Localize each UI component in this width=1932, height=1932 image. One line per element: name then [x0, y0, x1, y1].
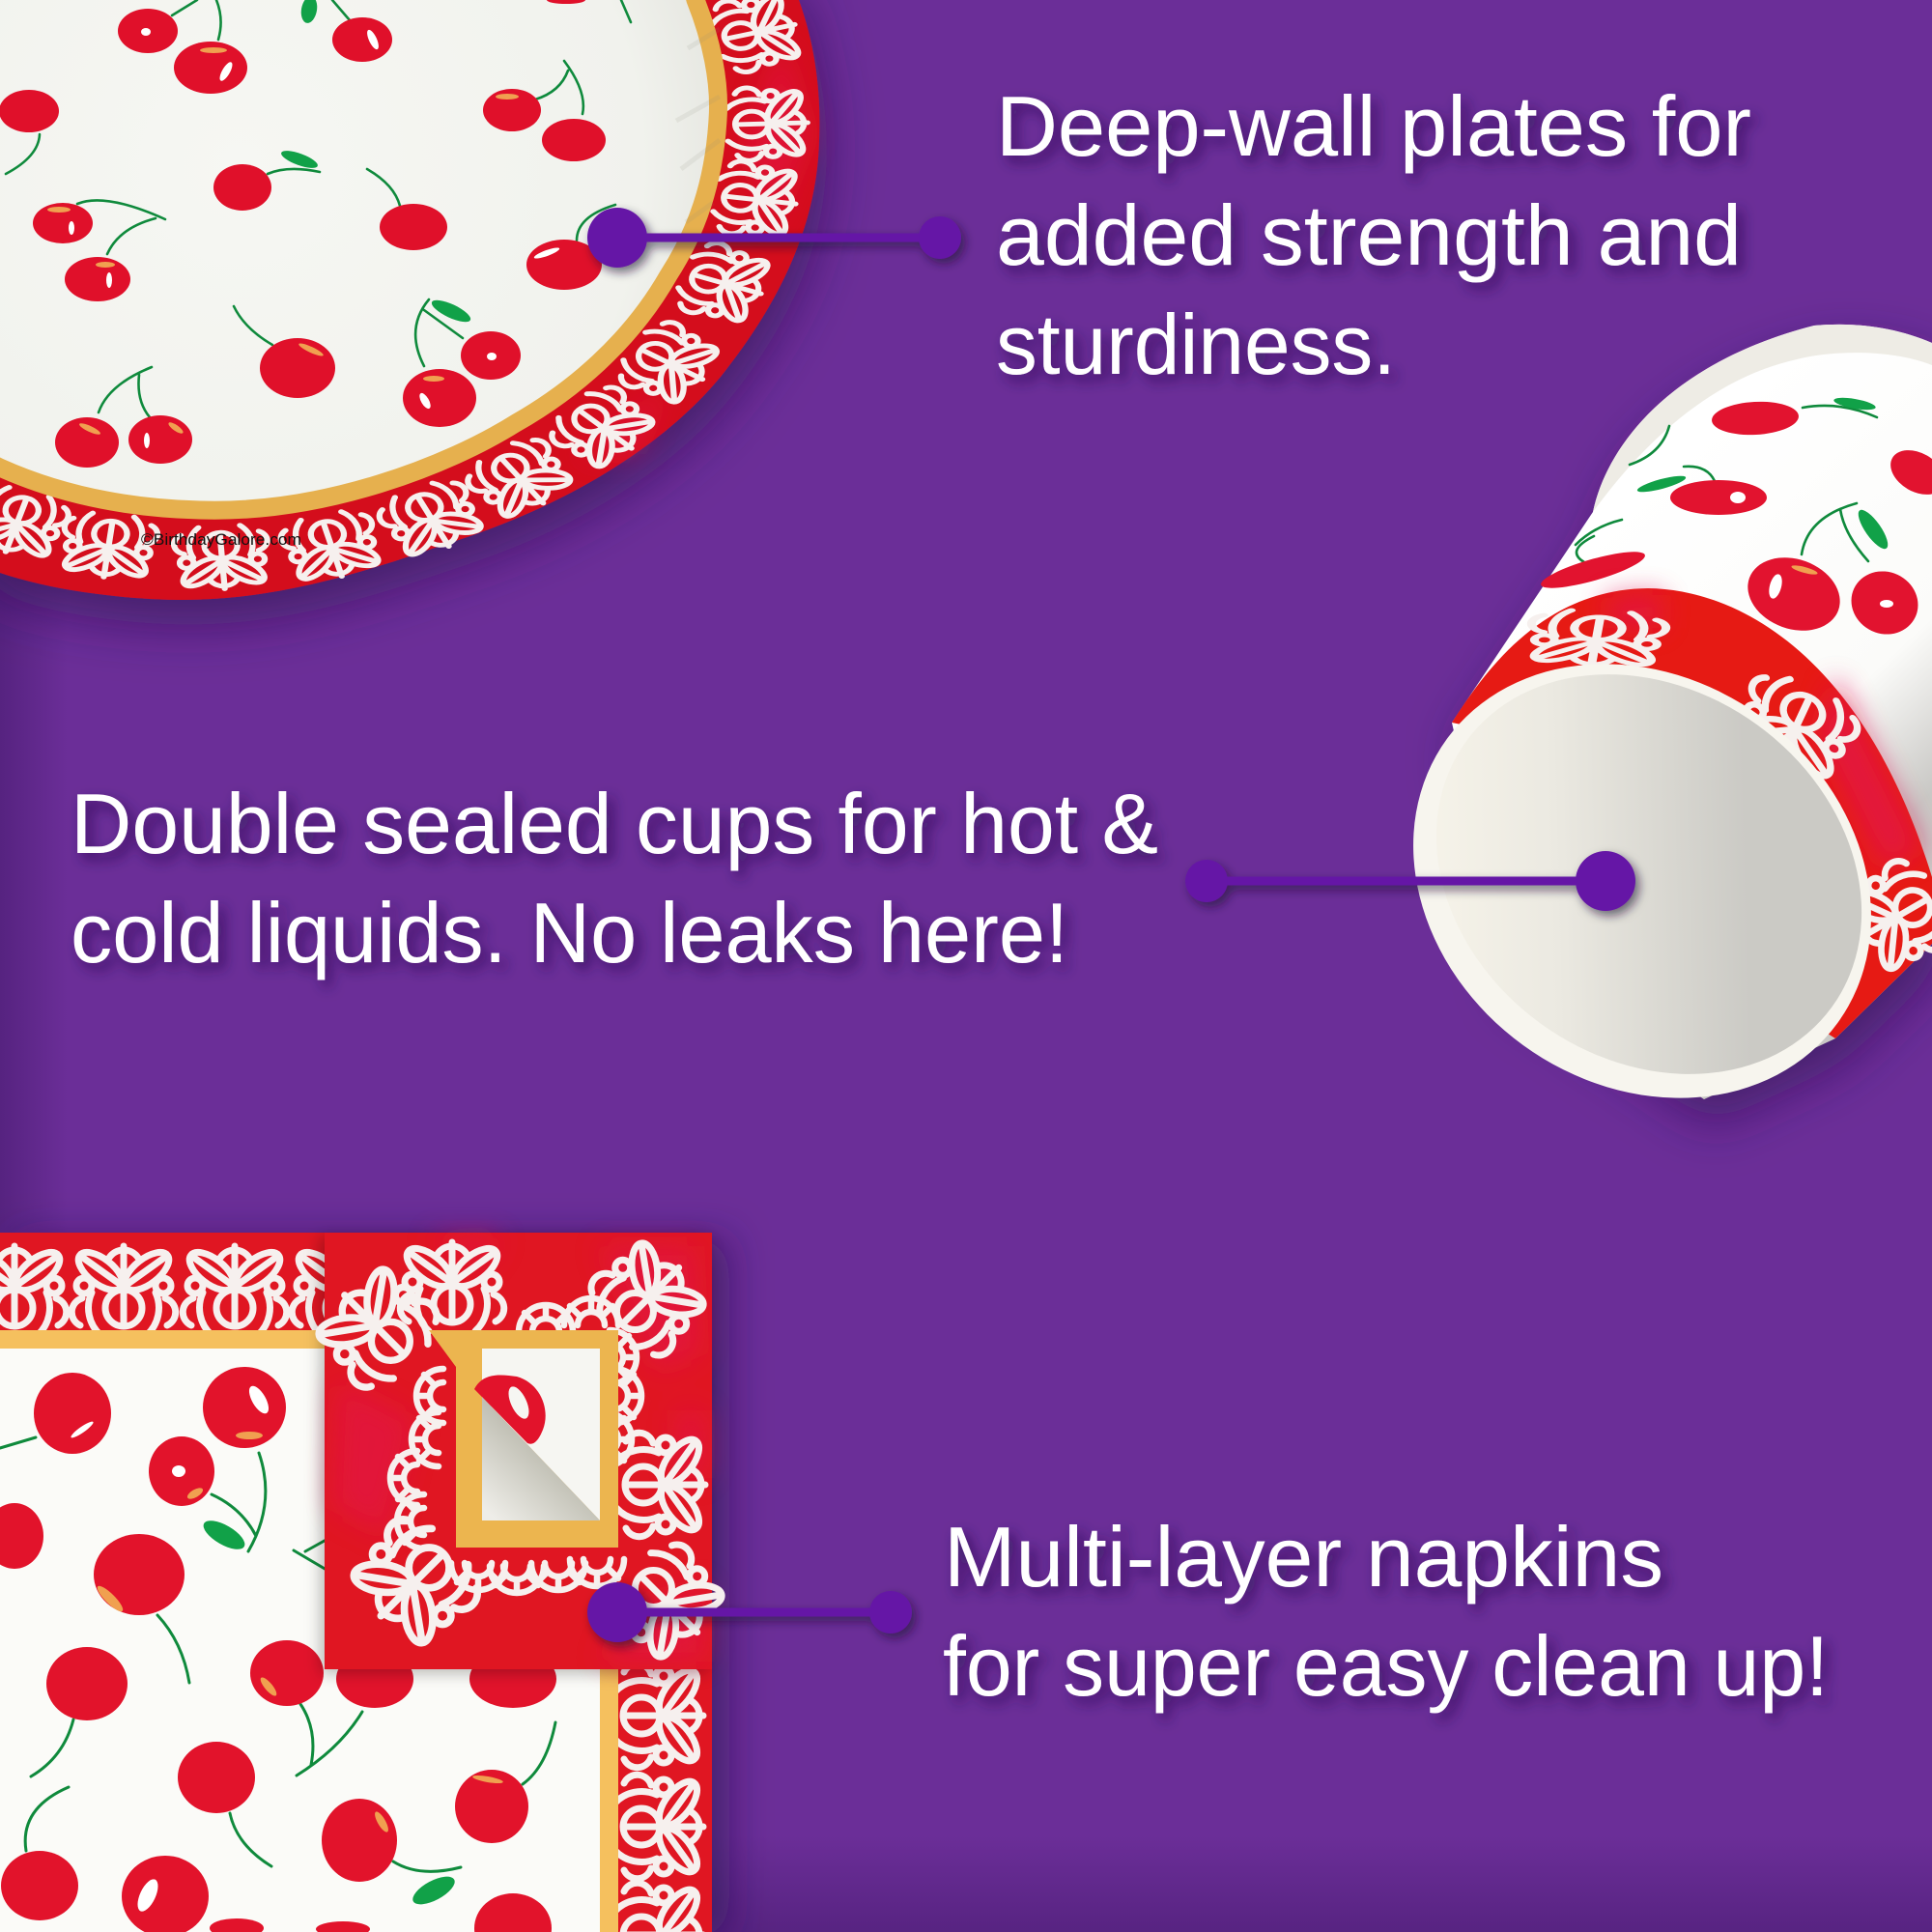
napkin base — [0, 1233, 712, 1932]
cup mouth — [1327, 575, 1932, 1187]
connector with dots — [1185, 851, 1635, 911]
caption: cups — [71, 776, 1158, 980]
caption: napkins: Multi-layer napkins — [944, 1509, 1663, 1605]
caption: plates: Deep-wall plates for — [996, 78, 1751, 174]
plate lace border — [0, 0, 810, 592]
caption: plates — [996, 78, 1751, 392]
caption: cups: cold liquids. No leaks here! — [71, 885, 1068, 980]
caption: cups: Double sealed cups for hot & — [71, 776, 1158, 871]
napkin cherries — [0, 1367, 556, 1932]
plate cherries — [0, 0, 606, 468]
fold grey triangle — [482, 1397, 600, 1520]
napkin right lace — [614, 1663, 704, 1932]
cup interior — [1357, 592, 1932, 1156]
napkin gold band and white field — [0, 1330, 618, 1932]
caption: plates: sturdiness. — [996, 297, 1396, 392]
fold highlight — [504, 1383, 533, 1422]
flap colour wash — [333, 1236, 705, 1662]
napkin top lace — [0, 1245, 396, 1335]
caption: plates: added strength and — [996, 187, 1742, 283]
connector with dots — [587, 208, 961, 268]
plate rim — [0, 0, 819, 600]
napkin stems and leaves — [0, 1437, 555, 1910]
napkin folded flap — [305, 1231, 734, 1669]
panel: napkin — [0, 1231, 734, 1932]
cup stems, leaves and cherries — [1538, 395, 1932, 645]
callout 1: plates — [587, 78, 1751, 392]
cup body — [1452, 325, 1932, 1099]
panel: paper plate — [0, 0, 819, 600]
cup band colour wash — [1604, 594, 1922, 869]
fold white triangle — [482, 1349, 600, 1520]
cup red band — [1452, 588, 1932, 1038]
plate stems and leaves — [6, 0, 631, 417]
caption: napkins: for super easy clean up! — [943, 1618, 1829, 1714]
plate well with gold ring — [0, 0, 719, 510]
connector with dots — [587, 1582, 912, 1642]
plate rim colour wash — [580, 39, 811, 454]
flap lace — [305, 1231, 734, 1669]
flap gold square — [429, 1330, 618, 1548]
plate copyright: ©BirthdayGalore.com — [141, 530, 301, 549]
cup lace — [1524, 609, 1932, 980]
fold cherry — [474, 1375, 546, 1444]
plate creases — [676, 29, 720, 222]
cup rolled lip — [1593, 325, 1932, 512]
callout 3: napkins — [587, 1509, 1829, 1714]
panel: paper cup — [1327, 325, 1932, 1187]
callout 2: cups — [71, 776, 1635, 980]
caption: napkins — [943, 1509, 1829, 1714]
